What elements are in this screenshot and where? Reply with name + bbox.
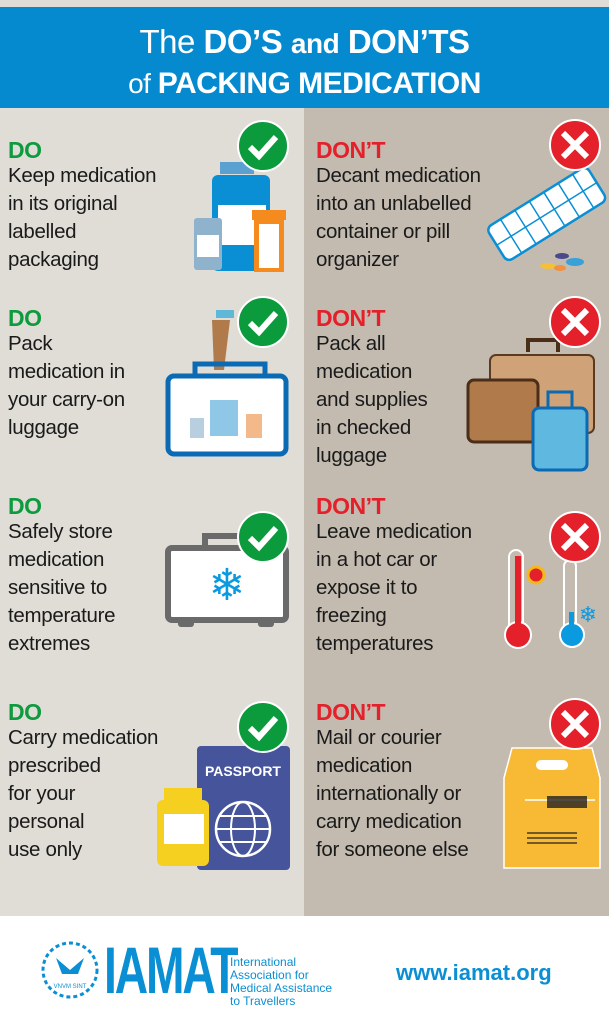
icon: pill bottles	[194, 162, 286, 272]
logo wordmark: IAMAT	[104, 933, 236, 1007]
dont 2: DON’T	[316, 305, 385, 331]
dont 1: DON’T	[316, 137, 385, 163]
logo emblem: VNVM SINT	[54, 984, 87, 990]
dont 3: Leave medication	[316, 520, 472, 543]
dont 4: Mail or courier	[316, 726, 441, 749]
do 3: extremes	[8, 632, 90, 655]
dont 1	[316, 137, 481, 271]
icon: thermometers	[505, 550, 597, 648]
do 1: labelled	[8, 220, 76, 243]
do 4: DO	[8, 699, 42, 725]
logo emblem	[42, 942, 98, 998]
do 1	[8, 137, 156, 271]
dont 2: luggage	[316, 444, 387, 467]
icon: cooler with snowflake	[168, 536, 286, 627]
dont 2: Pack all	[316, 332, 385, 355]
do 1: Keep medication	[8, 164, 156, 187]
do 4: for your	[8, 782, 75, 805]
logo tagline	[230, 955, 332, 1008]
dont 1: Decant medication	[316, 164, 481, 187]
icon: checked luggage	[468, 340, 594, 470]
dont 4: internationally or	[316, 782, 461, 805]
dont 4: DON’T	[316, 699, 385, 725]
do 1: in its original	[8, 192, 117, 215]
do 4: use only	[8, 838, 82, 861]
icon: passport and bottle	[157, 746, 290, 870]
do 1: packaging	[8, 248, 99, 271]
do 1: DO	[8, 137, 42, 163]
do 4: prescribed	[8, 754, 101, 777]
do 3: DO	[8, 493, 42, 519]
dont 3: freezing	[316, 604, 387, 627]
dont 4: carry medication	[316, 810, 462, 833]
do 4	[8, 699, 158, 861]
do 3	[8, 493, 115, 655]
dont 3: in a hot car or	[316, 548, 437, 571]
do 3: medication	[8, 548, 104, 571]
do 2	[8, 305, 125, 439]
panel: dos	[0, 108, 304, 916]
do 3: sensitive to	[8, 576, 107, 599]
logo tagline: Medical Assistance	[230, 981, 332, 995]
do 2: your carry-on	[8, 388, 125, 411]
icon: cross 3	[550, 512, 600, 562]
dont 3: temperatures	[316, 632, 433, 655]
dont 1: into an unlabelled	[316, 192, 471, 215]
do 4: personal	[8, 810, 84, 833]
dont 2: in checked	[316, 416, 411, 439]
title	[128, 23, 481, 100]
website: www.iamat.org	[396, 960, 552, 985]
dont 4: for someone else	[316, 838, 468, 861]
icon: cooler with snowflake: ❄	[209, 560, 245, 611]
dont 2: and supplies	[316, 388, 428, 411]
do 3: Safely store	[8, 520, 113, 543]
icon: carry-on with hand	[168, 310, 286, 454]
do 2: medication in	[8, 360, 125, 383]
icon: pill organizer	[486, 166, 607, 262]
logo tagline: Association for	[230, 968, 309, 982]
logo tagline: to Travellers	[230, 994, 295, 1008]
do 2: Pack	[8, 332, 52, 355]
dont 4: medication	[316, 754, 412, 777]
dont 3: DON’T	[316, 493, 385, 519]
dont 2	[316, 305, 428, 467]
do 3: temperature	[8, 604, 115, 627]
do 2: DO	[8, 305, 42, 331]
logo tagline: International	[230, 955, 296, 969]
icon: check 3	[238, 512, 288, 562]
title: of PACKING MEDICATION	[128, 67, 481, 100]
icon: passport and bottle: PASSPORT	[205, 763, 281, 779]
do 4: Carry medication	[8, 726, 158, 749]
title: The DO’S and DON’TS	[139, 23, 470, 60]
dont 4	[316, 699, 468, 861]
dont 1: organizer	[316, 248, 399, 271]
footer	[0, 916, 609, 1024]
dont 2: medication	[316, 360, 412, 383]
icon: thermometers: ❄	[579, 603, 597, 628]
panel: donts	[304, 108, 609, 916]
dont 3	[316, 493, 472, 655]
dont 3: expose it to	[316, 576, 417, 599]
icon: cross 1	[550, 120, 600, 170]
do 2: luggage	[8, 416, 79, 439]
dont 1: container or pill	[316, 220, 450, 243]
icon: parcel	[504, 748, 600, 868]
icon: cross 4	[550, 699, 600, 749]
icon: check 2	[238, 297, 288, 347]
icon: cross 2	[550, 297, 600, 347]
icon: check 1	[238, 121, 288, 171]
icon: check 4	[238, 702, 288, 752]
header banner	[0, 7, 609, 108]
